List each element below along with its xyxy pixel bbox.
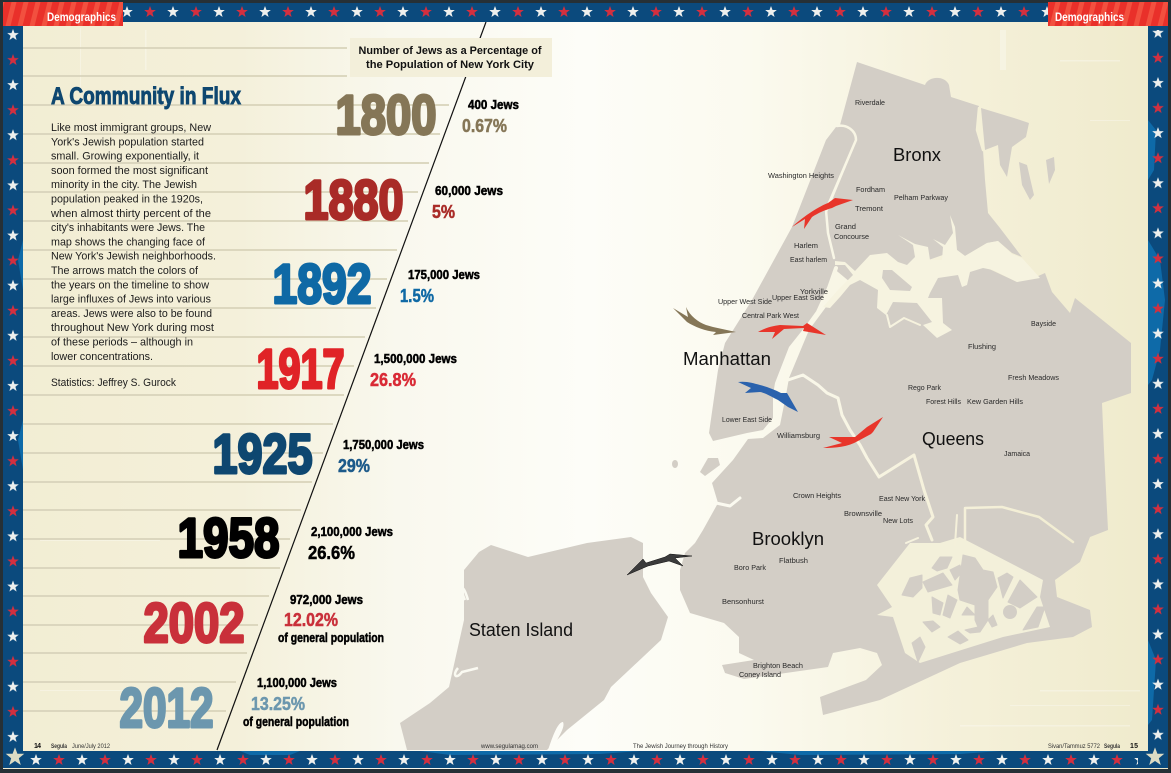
intro text: map shows the changing face of <box>51 236 205 248</box>
timeline entry 1917: 26.8% <box>370 370 416 390</box>
intro text: large influxes of Jews into various <box>51 294 211 306</box>
chart heading tab <box>350 38 552 77</box>
timeline entry 1800 <box>336 83 519 146</box>
section tab right: Demographics <box>1055 10 1124 24</box>
footer center: www.segulamag.com <box>480 744 538 750</box>
timeline entry 1800: 400 Jews <box>468 98 519 112</box>
map labels: Fordham <box>856 185 885 194</box>
map labels: East New York <box>879 494 925 503</box>
timeline entry 1917: 1917 <box>256 337 344 400</box>
intro text: areas. Jews were also to be found <box>51 308 212 320</box>
map labels: Pelham Parkway <box>894 193 948 202</box>
Pelham and islands <box>981 108 1055 200</box>
intro text: New York's Jewish neighborhoods. <box>51 251 216 263</box>
Long Island Sound and East River water <box>823 215 1040 338</box>
timeline entry 1880: 1880 <box>304 168 404 231</box>
intro text: when almost thirty percent of the <box>50 208 211 220</box>
map labels: New Lots <box>883 516 913 525</box>
timeline entry 1925: 1,750,000 Jews <box>343 438 424 452</box>
map labels: Harlem <box>794 241 818 250</box>
intro text: York's Jewish population started <box>51 136 204 148</box>
timeline entry 1892: 1.5% <box>400 286 434 306</box>
timeline entry 2002: 2002 <box>144 591 244 654</box>
timeline entry 1958 <box>178 506 393 569</box>
timeline entry 1800: 0.67% <box>462 116 507 136</box>
rivers and creeks <box>716 108 1073 545</box>
timeline entry 1925: 1925 <box>212 422 312 485</box>
timeline entry 2012: of general population <box>243 715 349 729</box>
intro text: The arrows match the colors of <box>51 265 198 277</box>
borough: Manhattan <box>709 127 855 441</box>
timeline entry 1880 <box>304 168 503 231</box>
timeline entry 1880: 60,000 Jews <box>435 184 503 198</box>
map labels: Bronx <box>893 145 941 165</box>
map labels: Flatbush <box>779 556 808 565</box>
map labels: Lower East Side <box>722 415 772 424</box>
map labels: Forest Hills <box>926 397 961 406</box>
map labels: Queens <box>922 429 984 449</box>
timeline entry 1917 <box>256 337 457 400</box>
arrow: red to the Bronx <box>792 198 853 229</box>
intro text: of these periods – although in <box>51 336 193 348</box>
timeline diagonal line <box>217 22 486 750</box>
map labels: Brooklyn <box>752 529 824 549</box>
intro text: soon formed the most significant <box>51 165 208 177</box>
map labels: Rego Park <box>908 383 941 392</box>
timeline entry 2012: 2012 <box>120 676 214 739</box>
map labels: Crown Heights <box>793 491 841 500</box>
timeline entry 2002: 12.02% <box>284 610 338 630</box>
map labels: Bensonhurst <box>722 597 765 606</box>
intro text <box>50 122 216 389</box>
intro text: city's inhabitants were Jews. The <box>51 222 205 234</box>
map labels: Tremont <box>855 204 884 213</box>
map labels: Concourse <box>834 232 869 241</box>
arrow: red to Forest Hills <box>823 417 883 448</box>
section tab right <box>1048 2 1168 26</box>
timeline entry 1892 <box>272 252 480 315</box>
timeline entry 1958: 2,100,000 Jews <box>311 525 393 539</box>
timeline entry 2012: 1,100,000 Jews <box>257 676 337 690</box>
map labels: Washington Heights <box>768 171 834 180</box>
arrow: black to Staten Island <box>627 554 692 575</box>
timeline entry 1892: 175,000 Jews <box>408 268 480 282</box>
timeline entry 1958: 26.6% <box>308 543 355 563</box>
intro text: throughout New York during most <box>51 322 214 334</box>
footer right: Segula <box>1104 744 1121 750</box>
timeline entry 2012 <box>120 676 349 739</box>
map labels: Fresh Meadows <box>1008 373 1059 382</box>
intro text: Like most immigrant groups, New <box>51 122 211 134</box>
intro text: population peaked in the 1920s, <box>51 194 203 206</box>
timeline entry 2002 <box>144 591 384 654</box>
Rikers Island <box>882 270 912 291</box>
footer left: Segula <box>51 744 68 750</box>
arrow: red to Queens <box>758 323 826 339</box>
intro text: minority in the city. The Jewish <box>51 179 197 191</box>
boroughs: Queens and Brooklyn <box>680 267 1131 715</box>
timeline entry 1880: 5% <box>432 202 455 222</box>
map labels: Coney Island <box>739 670 781 679</box>
intro text: the years on the timeline to show <box>51 279 209 291</box>
map labels: Jamaica <box>1004 449 1031 458</box>
chart heading tab: the Population of New York City <box>366 59 535 71</box>
Jamaica Bay marsh islands <box>902 555 1045 662</box>
map of New York City <box>400 62 1131 750</box>
arrow: blue to Williamsburg <box>738 382 798 412</box>
map labels: Upper West Side <box>718 297 772 306</box>
footer left: 14 <box>34 743 41 750</box>
map labels: Williamsburg <box>777 431 820 440</box>
map labels: Flushing <box>968 342 996 351</box>
map labels: Bayside <box>1031 319 1056 328</box>
section tab left <box>3 2 123 26</box>
timeline entry 1917: 1,500,000 Jews <box>374 352 457 366</box>
title: A Community in Flux <box>51 83 242 110</box>
borough: Bronx <box>826 62 1022 282</box>
footer center: The Jewish Journey through History <box>633 744 728 750</box>
footer center <box>480 744 728 750</box>
footer left <box>34 743 111 750</box>
section tab left: Demographics <box>47 10 116 24</box>
footer right: 15 <box>1130 743 1138 750</box>
timeline entry 1925 <box>212 422 424 485</box>
map labels: East harlem <box>790 255 827 264</box>
footer right: Sivan/Tammuz 5772 <box>1048 744 1101 750</box>
arrow: brown to Upper West Side <box>673 307 736 335</box>
Jamaica Bay water <box>877 537 1050 663</box>
chart heading tab: Number of Jews as a Percentage of <box>358 45 542 57</box>
borough: Staten Island <box>400 537 668 750</box>
intro text: lower concentrations. <box>51 351 153 363</box>
map labels: Central Park West <box>742 311 800 320</box>
timeline entry 1892: 1892 <box>272 252 372 315</box>
timeline entry 2002: 972,000 Jews <box>290 593 363 607</box>
map labels: Brownsville <box>844 509 882 518</box>
small islands <box>700 458 720 476</box>
map labels: Grand <box>835 222 856 231</box>
intro text: small. Growing exponentially, it <box>51 151 199 163</box>
intro text: Statistics: Jeffrey S. Gurock <box>51 377 177 389</box>
map labels: Yorkville <box>800 287 828 296</box>
timeline entry 1925: 29% <box>338 456 370 476</box>
map labels: Upper East Side <box>772 293 824 302</box>
timeline entry 1958: 1958 <box>178 506 280 569</box>
map labels: Riverdale <box>855 98 885 107</box>
timeline entry 2002: of general population <box>278 631 384 645</box>
map labels <box>469 98 1059 679</box>
map labels: Staten Island <box>469 620 573 640</box>
timeline entry 1800: 1800 <box>336 83 436 146</box>
map labels: Brighton Beach <box>753 661 803 670</box>
map labels: Boro Park <box>734 563 766 572</box>
map labels: Kew Garden Hills <box>967 397 1023 406</box>
timeline entry 2012: 13.25% <box>251 694 305 714</box>
footer left: June/July 2012 <box>72 744 111 750</box>
map labels: Manhattan <box>683 349 771 369</box>
footer right <box>1048 743 1138 750</box>
